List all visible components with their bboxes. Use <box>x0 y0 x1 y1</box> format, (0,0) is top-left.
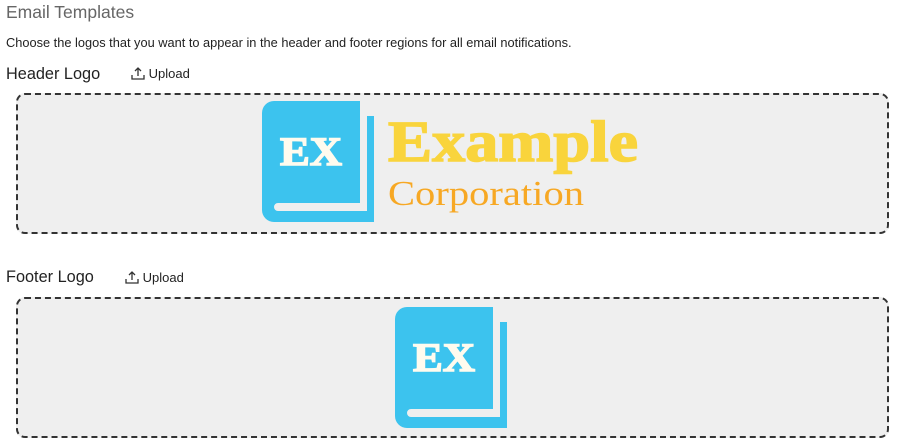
upload button: footer: Upload <box>143 270 184 285</box>
logo: Example Corporation: Example <box>388 109 638 174</box>
logo: Example Corporation <box>262 101 638 222</box>
heading: footer logo: Footer Logo <box>6 268 94 286</box>
panel: header logo dropzone <box>16 93 889 234</box>
upload button: header: Upload <box>149 66 190 81</box>
title: Email Templates <box>6 2 134 22</box>
logo: EX book icon: EX <box>413 335 475 380</box>
logo: Example Corporation: Corporation <box>388 174 584 213</box>
heading: header logo: Header Logo <box>6 65 100 83</box>
description: Choose the logos that you want to appear in the header and footer regions for all email notifications. <box>6 35 572 50</box>
panel: footer logo dropzone <box>16 297 889 438</box>
logo: Example Corporation: EX <box>280 129 342 174</box>
logo: EX book icon <box>395 307 507 428</box>
